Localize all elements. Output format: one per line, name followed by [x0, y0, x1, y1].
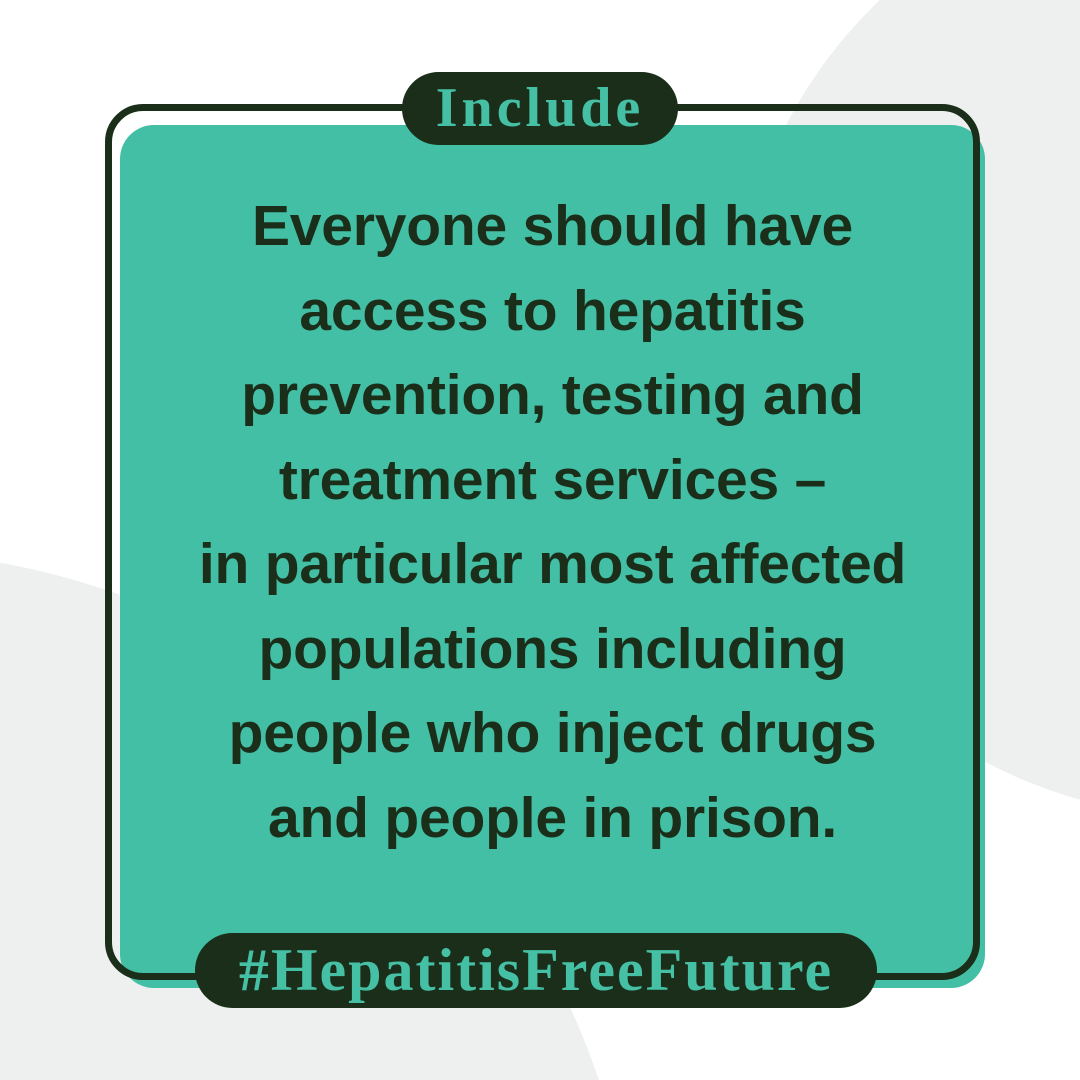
- heading pill: Include: Include: [436, 77, 644, 139]
- main text block: treatment services –: [279, 448, 826, 512]
- main text block: [199, 194, 906, 850]
- main text block: Everyone should have: [252, 194, 853, 258]
- heading pill: Include: [402, 72, 678, 145]
- main text block: people who inject drugs: [229, 701, 876, 765]
- main text block: access to hepatitis: [299, 278, 806, 342]
- panel outline: [105, 104, 980, 980]
- main text block: in particular most affected: [199, 532, 906, 596]
- main text block: prevention, testing and: [241, 363, 864, 427]
- main text block: and people in prison.: [268, 786, 837, 850]
- hashtag pill: #HepatitisFreeFuture: [239, 937, 833, 1003]
- main text block: populations including: [259, 616, 846, 680]
- panel: teal card: [120, 125, 985, 988]
